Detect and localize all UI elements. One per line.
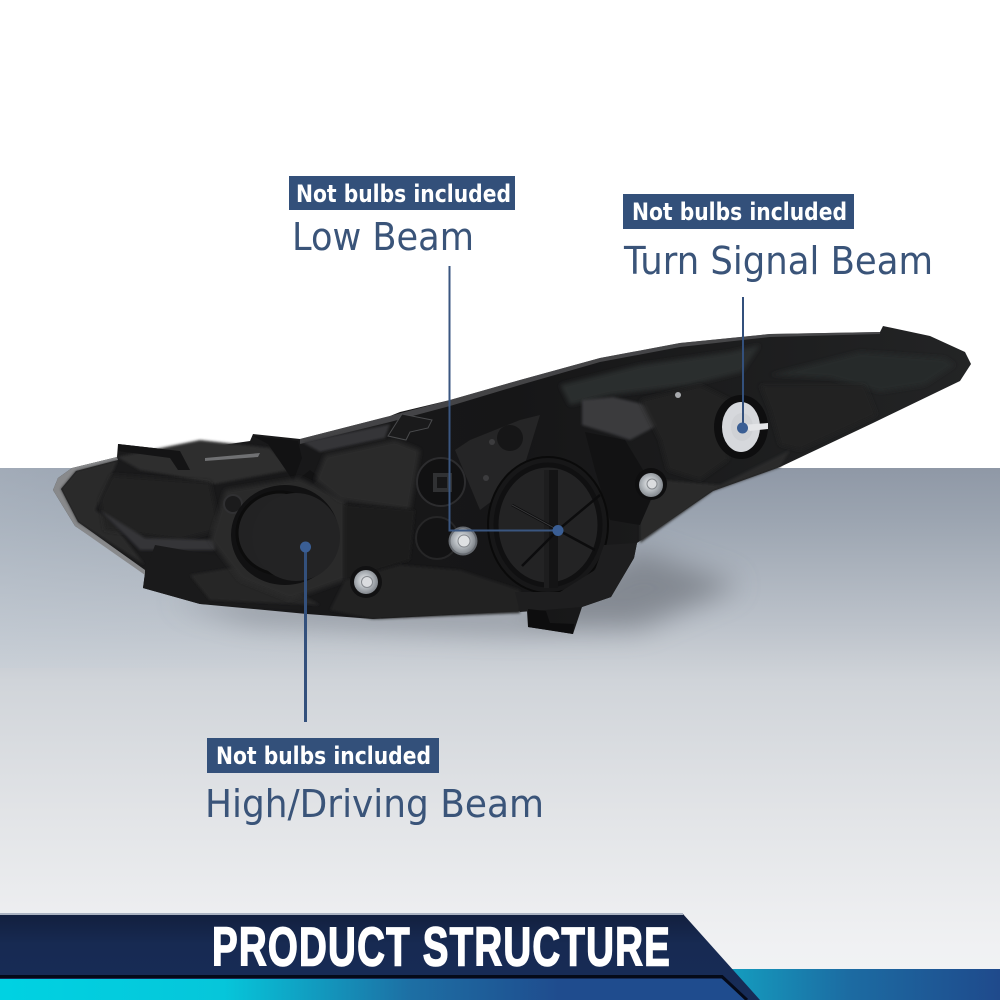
left outer rim xyxy=(53,457,145,575)
floor shadow under headlight xyxy=(170,550,740,630)
leader: high driving beam xyxy=(300,542,311,722)
lower plate xyxy=(190,565,320,605)
high beam housing panel xyxy=(210,478,345,600)
light strip on housing xyxy=(205,453,260,461)
banner top edge xyxy=(0,913,683,915)
background: white upper area xyxy=(0,0,1000,468)
high beam cap xyxy=(231,485,340,585)
ball detail xyxy=(455,415,540,510)
background: grey floor gradient xyxy=(0,468,1000,1000)
centre block xyxy=(315,440,420,510)
left mid block xyxy=(100,475,220,540)
socket lower xyxy=(416,517,458,559)
upper housing strip xyxy=(302,424,390,452)
lower right bracket xyxy=(515,543,637,612)
bolt low beam xyxy=(448,526,478,556)
lower frame xyxy=(330,565,520,619)
left ledge xyxy=(100,510,215,550)
callout: low beam: Low Beam xyxy=(292,215,474,259)
leader: low beam xyxy=(450,266,564,536)
left panel xyxy=(61,460,145,565)
headlight silhouette xyxy=(53,326,971,634)
banner inner stripe xyxy=(0,979,746,1000)
top rim highlight xyxy=(300,332,880,444)
upper vent xyxy=(388,414,432,440)
grey block upper xyxy=(582,397,660,440)
left lower block xyxy=(143,545,300,610)
banner xyxy=(0,913,1000,1000)
headlight assembly xyxy=(53,326,971,634)
banner title: PRODUCT STRUCTURE xyxy=(212,917,670,978)
callout: high driving beam: Not bulbs included xyxy=(216,742,431,770)
low beam disc xyxy=(488,457,608,593)
clip lever xyxy=(118,444,190,470)
callout: low beam xyxy=(289,176,515,259)
right lobe xyxy=(770,352,955,392)
callout: high driving beam: High/Driving Beam xyxy=(205,782,544,826)
small port xyxy=(224,495,242,513)
connector socket upper xyxy=(417,458,465,506)
bolt right xyxy=(635,468,667,500)
callout: low beam: Not bulbs included xyxy=(296,180,511,208)
callout: turn signal beam: Not bulbs included xyxy=(632,198,847,226)
banner stripe dark edge xyxy=(0,976,747,1000)
callout: high driving beam xyxy=(205,738,544,826)
right of block panel xyxy=(640,385,730,480)
wing panel right xyxy=(560,345,760,405)
callout: turn signal beam xyxy=(623,194,933,283)
bottom tab xyxy=(528,609,574,634)
background: left floor tint xyxy=(0,468,1000,668)
wing lower panel xyxy=(760,385,877,450)
left upper housing xyxy=(117,440,290,484)
leader: turn signal beam xyxy=(737,297,748,434)
top connector xyxy=(253,436,320,490)
banner right teal strip xyxy=(700,969,1000,1000)
callout: turn signal beam: Turn Signal Beam xyxy=(623,239,933,283)
white turn signal socket xyxy=(714,395,768,459)
wing lower strip xyxy=(640,450,790,543)
dark block mid xyxy=(585,432,655,525)
banner navy shape xyxy=(0,914,760,1000)
bolt lower xyxy=(350,566,382,598)
small stud xyxy=(675,392,681,398)
centre shadow band xyxy=(345,505,415,580)
